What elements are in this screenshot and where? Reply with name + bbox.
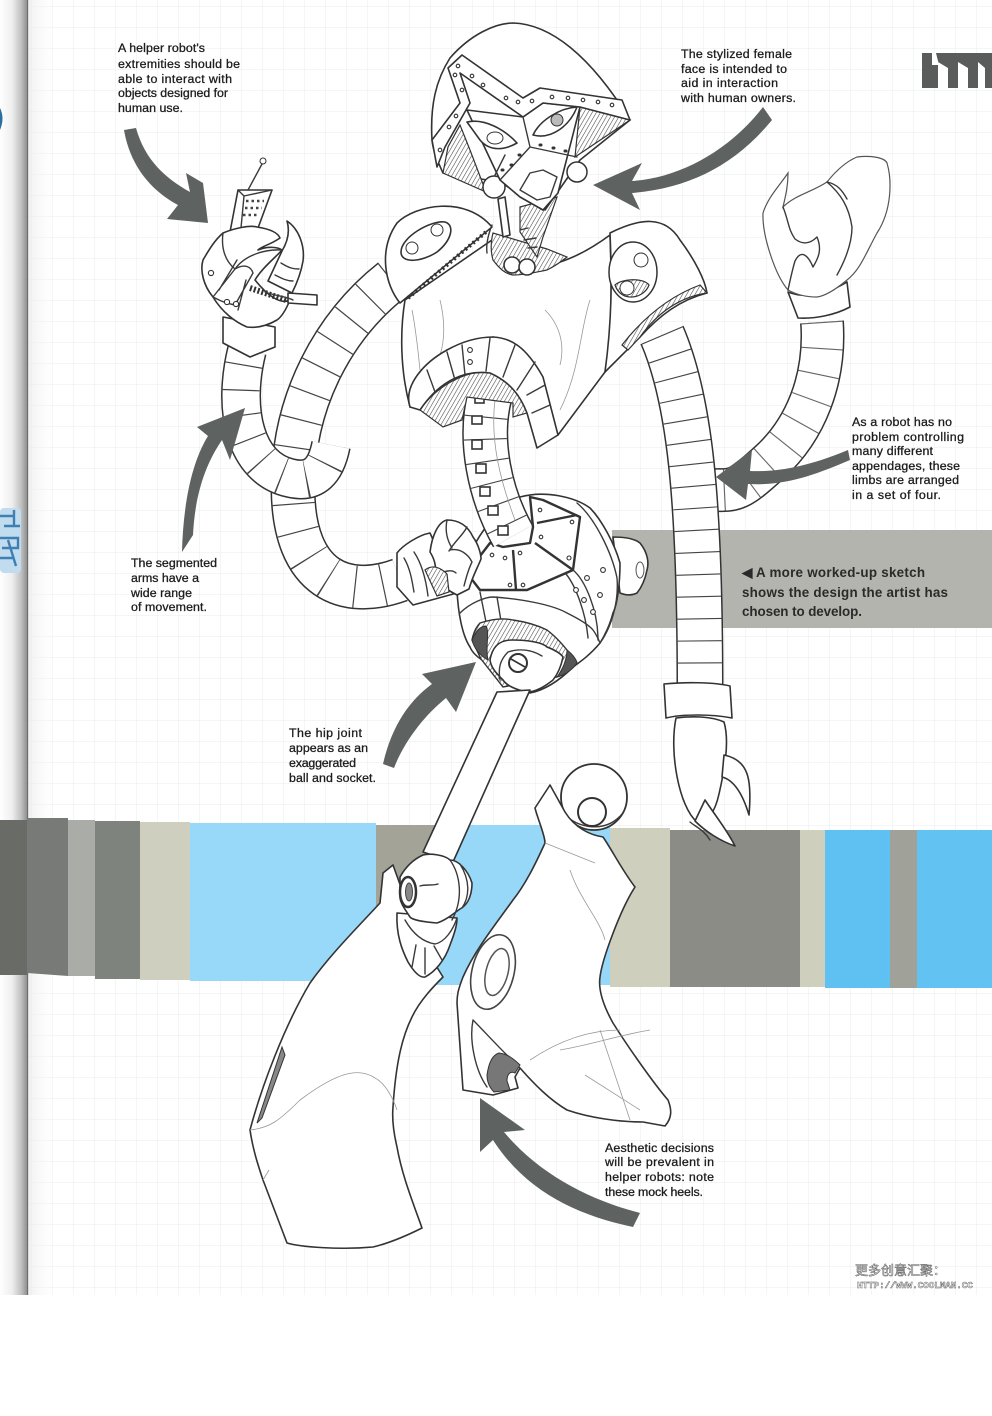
text: extremities note: extremities should be (118, 57, 240, 71)
text: caption on grey band: chosen to develop. (742, 604, 862, 619)
left lower arm to waist hand (293, 280, 400, 587)
waist hand (397, 520, 481, 605)
right long arm (662, 335, 700, 690)
text: caption on grey band: shows the design the artist has (742, 585, 948, 600)
neck rods (498, 197, 510, 237)
text: segmented arms note: arms have a (131, 571, 199, 585)
robot drawing (202, 23, 890, 1248)
arrow: to segmented arm (182, 408, 245, 552)
knee ball (400, 854, 472, 923)
arrow: to hip joint (383, 662, 476, 768)
claw thumb (268, 221, 303, 293)
rib ring hatched underside (420, 372, 527, 427)
left hand holding phone (202, 158, 317, 327)
text: hip joint note: ball and socket. (289, 771, 376, 785)
right boot with mock heel (457, 785, 671, 1126)
arrow: to limbs (716, 450, 850, 500)
text: heels note: helper robots: note (605, 1170, 714, 1184)
boot ankle hole (463, 930, 523, 1014)
eyes (467, 121, 517, 149)
right cuff and clawed hand (664, 683, 750, 846)
collar (491, 233, 567, 275)
forehead band (432, 55, 630, 167)
text: caption on grey band: ◀ A more worked-up sketch (741, 565, 925, 580)
text: extremities note: A helper robot's (118, 41, 205, 55)
rib ring (409, 337, 558, 448)
text: hip joint note: The hip joint (289, 726, 363, 740)
head dome (432, 23, 630, 210)
text: segmented arms note: The segmented (131, 556, 217, 570)
right small arm with raised fist (705, 156, 890, 490)
arrow: to hand (124, 128, 208, 223)
text: limbs note: problem controlling (852, 430, 964, 444)
mock heel (472, 1020, 520, 1087)
face plate (467, 103, 580, 210)
grey horizontal band (612, 530, 992, 628)
arrow: to heel (480, 1098, 640, 1227)
text: extremities note: human use. (118, 101, 183, 115)
watermark (855, 1263, 973, 1291)
text: hip joint note: exaggerated (289, 756, 356, 770)
spine (472, 395, 515, 536)
text: face note: with human owners. (680, 91, 796, 105)
text: extremities note (118, 41, 240, 115)
text: heels note (604, 1141, 714, 1199)
text: face note: aid in interaction (681, 76, 778, 90)
text: face note: The stylized female (681, 47, 792, 61)
neck and head (432, 23, 630, 275)
text: limbs note: appendages, these (852, 459, 960, 473)
leg slot (257, 1047, 285, 1123)
under-knee cup (397, 913, 457, 977)
left ear (483, 176, 505, 198)
text: limbs note: many different (852, 444, 934, 458)
ball body (457, 494, 620, 693)
corner tab mark (922, 53, 992, 88)
right shoulder (605, 221, 707, 372)
text: heels note: these mock heels. (605, 1185, 703, 1199)
text: segmented arms note: of movement. (131, 600, 207, 614)
colour stripe band (0, 818, 992, 988)
chin mask (495, 117, 577, 180)
text: limbs note: in a set of four. (852, 488, 941, 502)
watermark: 更多创意汇聚： (855, 1263, 946, 1278)
text: hip joint note: appears as an (289, 741, 368, 755)
text: limbs note (852, 415, 964, 502)
text: segmented arms note (130, 556, 217, 614)
text: heels note: Aesthetic decisions (605, 1141, 714, 1155)
text: face note: face is intended to (681, 62, 787, 76)
watermark: HTTP://WWW.COOLMAN.CC (857, 1280, 973, 1291)
text: hip joint note (289, 726, 376, 785)
fist (202, 226, 290, 327)
hip socket (472, 619, 577, 692)
left shoulder (385, 206, 492, 303)
phone (230, 158, 272, 232)
text: extremities note: objects designed for (118, 86, 228, 100)
side nub (613, 537, 648, 595)
left upper arm with cuff (223, 317, 331, 479)
left lower leg (250, 854, 472, 1248)
held bar (288, 293, 317, 305)
text: heels note: will be prevalent in (604, 1155, 714, 1169)
torso (402, 235, 611, 448)
text: extremities note: able to interact with (118, 72, 232, 86)
plated panels (470, 497, 580, 590)
text: limbs note: limbs are arranged (852, 473, 959, 487)
thigh (423, 690, 530, 862)
text: limbs note: As a robot has no (852, 415, 952, 429)
arrow: to face (593, 107, 772, 210)
right ear (567, 162, 587, 182)
text: face note (680, 47, 796, 105)
right knee ball (561, 764, 627, 830)
text: segmented arms note: wide range (130, 586, 192, 600)
pelvis (457, 494, 648, 693)
text: caption on grey band (741, 565, 948, 619)
